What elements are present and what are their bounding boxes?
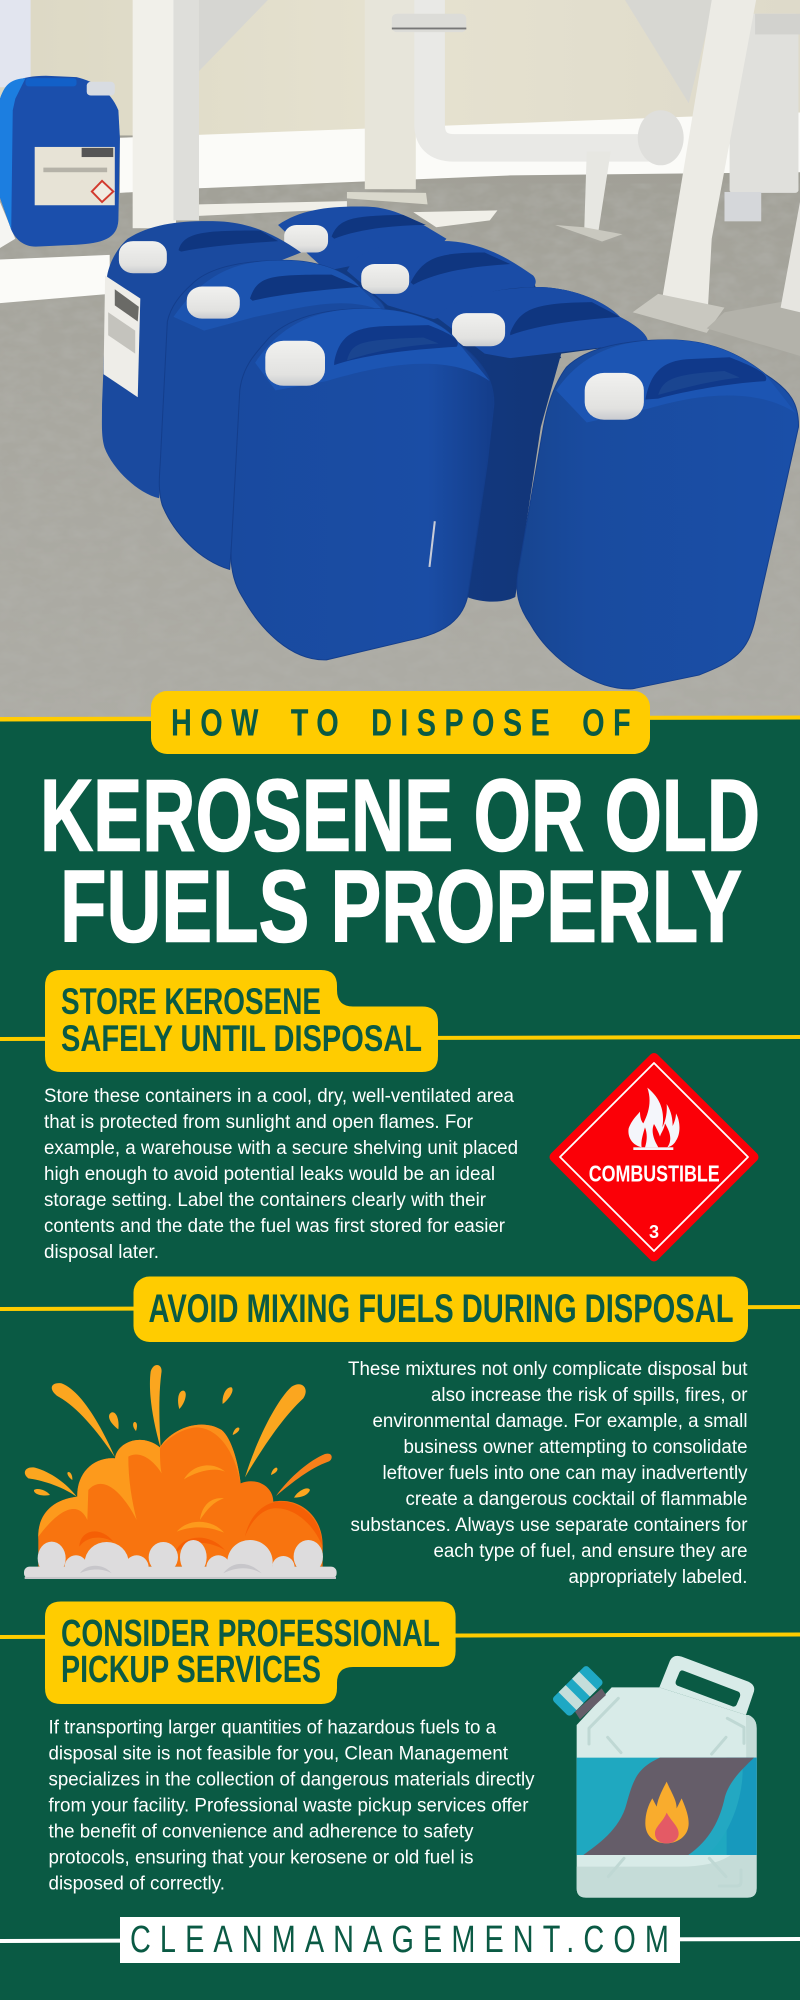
section 2 heading tag: [134, 1276, 748, 1342]
can embossed marks: [589, 1698, 744, 1886]
can handle: [659, 1656, 754, 1715]
photo: small labelled jug at back left: [0, 76, 120, 247]
section 3 heading tag: CONSIDER PROFESSIONAL: [61, 1613, 440, 1655]
flame on label: [645, 1782, 689, 1843]
section 2 divider line: [0, 1305, 800, 1311]
section 1 body text: contents and the date the fuel was first stored for easier: [44, 1216, 506, 1237]
section 2 body text: substances. Always use separate containers for: [350, 1515, 748, 1536]
section 3 body text: specializes in the collection of dangerous materials directly: [48, 1770, 535, 1790]
photo: front jug: [231, 309, 494, 660]
main title: [40, 758, 760, 964]
section 2 body text: appropriately labeled.: [568, 1567, 748, 1588]
section 3 body text: protocols, ensuring that your kerosene or old fuel is: [48, 1848, 474, 1868]
smoke cloud: [24, 1540, 337, 1579]
can body: [577, 1687, 757, 1898]
fireball: [38, 1425, 323, 1567]
photo: middle left jug: [159, 260, 385, 569]
section 3 body text: If transporting larger quantities of hazardous fuels to a: [48, 1718, 496, 1738]
photo: right jug: [517, 340, 798, 689]
section 1 body text: Store these containers in a cool, dry, well-ventilated area: [44, 1086, 514, 1107]
photo: blue kerosene jugs on a concrete floor: [0, 0, 800, 735]
subtitle tag: how to dispose of: [151, 691, 650, 754]
section 3 divider line: [0, 1632, 800, 1639]
section 1 heading tag: STORE KEROSENE: [61, 981, 321, 1022]
icon: orange explosion with smoke: [24, 1365, 337, 1584]
section 1 body text: disposal later.: [44, 1242, 159, 1263]
section 1 heading tag: SAFELY UNTIL DISPOSAL: [61, 1018, 422, 1059]
section 2 body text: also increase the risk of spills, fires, or: [431, 1385, 748, 1406]
header divider line: [0, 716, 800, 722]
section 3 body text: [48, 1718, 535, 1894]
section 3 body text: disposal site is not feasible for you, Clean Management: [48, 1744, 509, 1764]
flame symbol: [628, 1088, 679, 1150]
subtitle tag: how to dispose of: HOW TO DISPOSE OF: [171, 702, 639, 744]
photo: second back jug: [347, 241, 536, 319]
section 1 body text: [44, 1086, 518, 1263]
label band: [577, 1758, 757, 1855]
section 3 body text: the benefit of convenience and adherence to safety: [48, 1822, 474, 1842]
splash droplets: [25, 1365, 310, 1498]
section 3 heading tag: [45, 1602, 456, 1704]
photo: columns and pipework: [0, 0, 800, 356]
section 2 body text: business owner attempting to consolidate: [404, 1437, 748, 1458]
icon: fuel jerry can with flame: [552, 1656, 757, 1898]
section 3 body text: from your facility. Professional waste pickup services offer: [48, 1796, 529, 1816]
green background panel: [0, 717, 800, 2000]
section 2 body text: These mixtures not only complicate disposal but: [348, 1359, 748, 1380]
icon: combustible hazard diamond: [554, 1058, 754, 1256]
photo: back jug: [278, 206, 446, 271]
photo: left jug with label: [102, 221, 301, 498]
section 1 body text: high enough to avoid potential leaks would be an ideal: [44, 1164, 495, 1185]
footer divider line: [0, 1937, 800, 1943]
photo background: wall, floor and light: [0, 0, 800, 735]
section 2 body text: create a dangerous cocktail of flammable: [406, 1489, 748, 1510]
section 1 body text: example, a warehouse with a secure shelving unit placed: [44, 1138, 518, 1159]
section 3 heading tag: PICKUP SERVICES: [61, 1649, 321, 1691]
section 1 divider line: [0, 1035, 800, 1041]
section 3 body text: disposed of correctly.: [48, 1874, 225, 1894]
section 2 body text: [348, 1359, 748, 1588]
section 2 body text: each type of fuel, and ensure they are: [434, 1541, 748, 1562]
section 2 body text: environmental damage. For example, a small: [372, 1411, 748, 1432]
photo: middle right jug: [436, 287, 648, 602]
photo: shadow mass behind the back jugs: [316, 257, 561, 367]
section 1 body text: that is protected from sunlight and open flames. For: [44, 1112, 474, 1133]
section 1 body text: storage setting. Label the containers clearly with their: [44, 1190, 487, 1211]
can neck and cap: [575, 1688, 606, 1719]
icon: combustible hazard diamond: COMBUSTIBLE: [589, 1160, 720, 1186]
section 2 body text: leftover fuels into one can may inadvertently: [382, 1463, 748, 1484]
section 1 heading tag: [45, 970, 438, 1072]
icon: combustible hazard diamond: 3: [649, 1222, 659, 1242]
